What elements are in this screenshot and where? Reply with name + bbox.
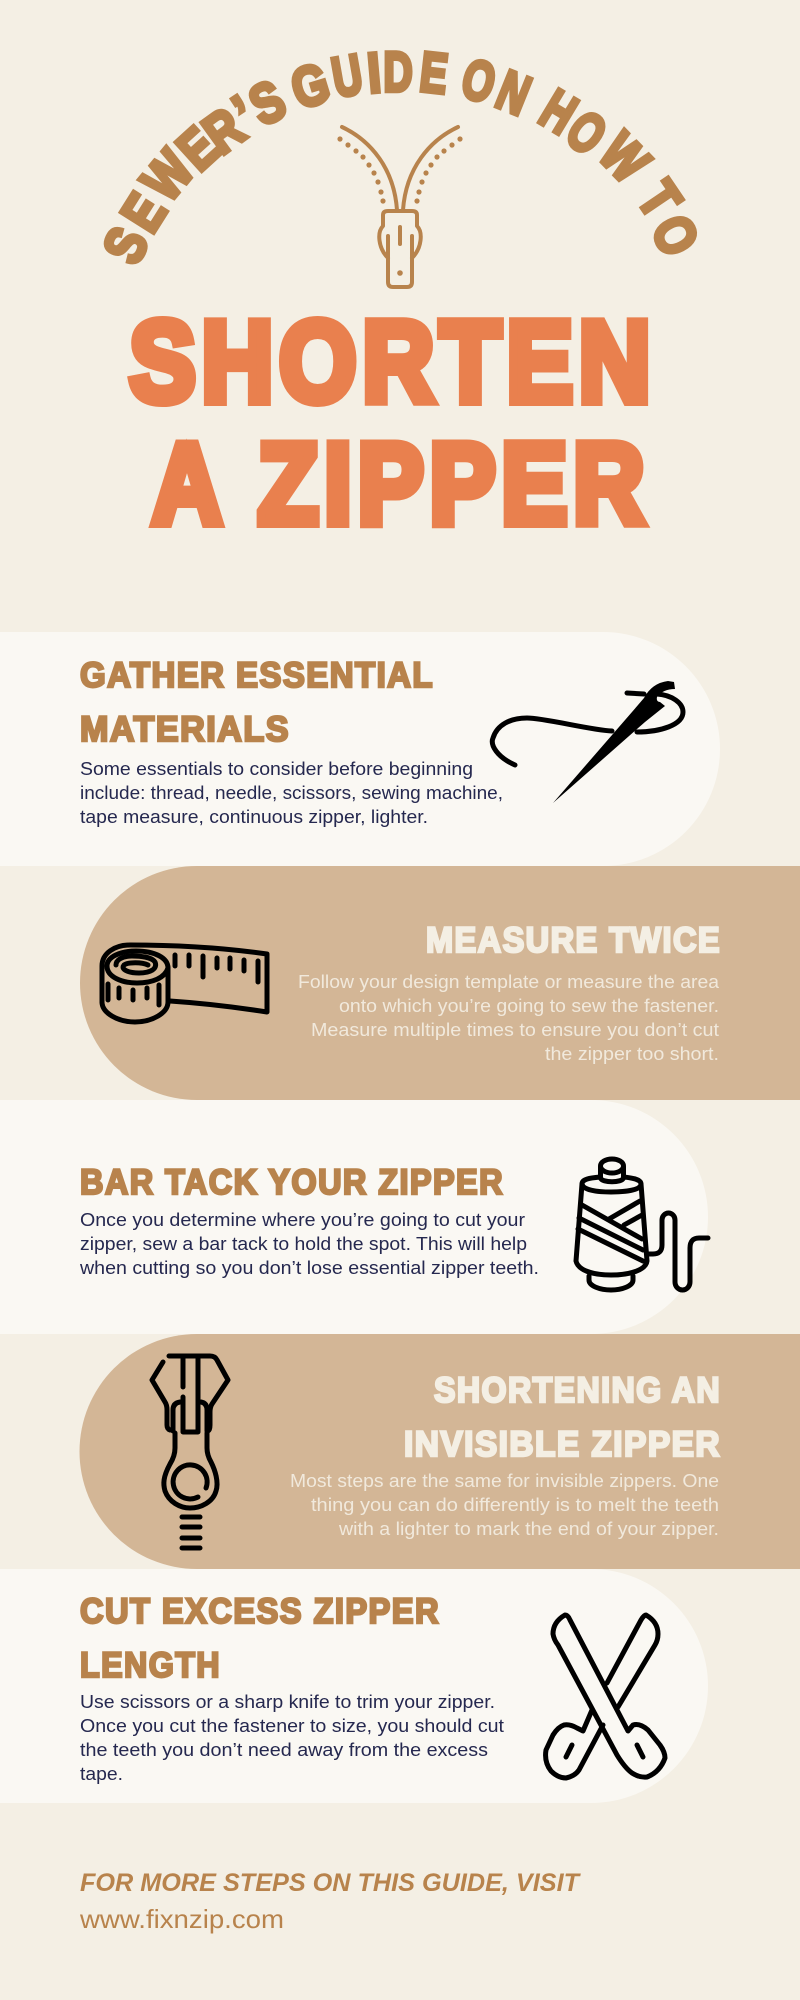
- curved heading: [91, 41, 711, 273]
- body text: [290, 1471, 719, 1539]
- heading: shortening an invisible zipper: [404, 1371, 721, 1464]
- heading: cut excess zipper length: LENGTH: [80, 1646, 221, 1685]
- heading: measure twice: MEASURE TWICE: [426, 921, 721, 960]
- heading: gather essential materials: MATERIALS: [80, 710, 290, 749]
- heading: cut excess zipper length: CUT EXCESS ZIPPER: [80, 1592, 440, 1631]
- footer call to action: FOR MORE STEPS ON THIS GUIDE, VISIT: [80, 1869, 582, 1897]
- panel: gather essential materials: [0, 632, 720, 866]
- curved heading: ’: [223, 84, 267, 143]
- heading: shortening an invisible zipper: INVISIBLE ZIPPER: [404, 1425, 721, 1464]
- body text: include: thread, needle, scissors, sewing machine,: [80, 783, 503, 803]
- curved heading: T: [626, 170, 693, 229]
- heading: shortening an invisible zipper: SHORTENING AN: [434, 1371, 721, 1410]
- main title: ZIPPER: [258, 421, 650, 548]
- icon: tape measure: [102, 945, 267, 1022]
- icon: open zipper: [337, 127, 463, 287]
- icon: scissors: [546, 1615, 665, 1778]
- curved heading: N: [488, 59, 538, 128]
- heading: gather essential materials: [80, 656, 434, 749]
- curved heading: G: [284, 51, 336, 121]
- body text: Measure multiple times to ensure you don’t cut: [311, 1020, 719, 1040]
- heading: bar tack your zipper: BAR TACK YOUR ZIPPER: [80, 1163, 504, 1202]
- heading: cut excess zipper length: [80, 1592, 440, 1685]
- panel: shortening an invisible zipper: [79, 1334, 800, 1569]
- curved heading: W: [130, 139, 206, 212]
- body text: when cutting so you don’t lose essential zipper teeth.: [79, 1258, 539, 1278]
- curved heading: E: [165, 115, 230, 182]
- curved heading: W: [587, 121, 661, 195]
- curved heading: E: [417, 41, 451, 106]
- curved heading: E: [109, 183, 178, 242]
- panel: cut excess zipper length: [0, 1569, 708, 1803]
- curved heading: I: [365, 41, 383, 104]
- body text: Some essentials to consider before beginning: [80, 759, 473, 779]
- body text: onto which you’re going to sew the fastener.: [339, 996, 719, 1016]
- body text: tape.: [80, 1764, 123, 1784]
- body text: tape measure, continuous zipper, lighter.: [80, 807, 428, 827]
- body text: [298, 972, 720, 1064]
- heading: gather essential materials: GATHER ESSENTIAL: [80, 656, 434, 695]
- body text: [80, 1692, 504, 1784]
- body text: the teeth you don’t need away from the excess: [80, 1740, 488, 1760]
- curved heading: O: [455, 48, 502, 116]
- body text: zipper, sew a bar tack to hold the spot. This will help: [80, 1234, 527, 1254]
- curved heading: S: [240, 68, 295, 137]
- footer call to action: [79, 1869, 582, 1934]
- footer call to action: www.fixnzip.com: [79, 1904, 284, 1934]
- curved heading: H: [530, 78, 587, 146]
- main title: A: [152, 421, 222, 548]
- body text: Once you cut the fastener to size, you should cut: [80, 1716, 504, 1736]
- body text: Follow your design template or measure the area: [298, 972, 720, 992]
- main title: SHORTEN: [130, 299, 656, 426]
- panel: measure twice: [80, 866, 800, 1100]
- body text: Use scissors or a sharp knife to trim your zipper.: [80, 1692, 495, 1712]
- main title: [130, 299, 656, 548]
- icon: needle and thread: [492, 681, 683, 803]
- icon: zipper pull: [152, 1356, 228, 1548]
- body text: [79, 1210, 539, 1278]
- panel: bar tack your zipper: [0, 1100, 708, 1334]
- curved heading: O: [639, 205, 711, 265]
- body text: [80, 759, 503, 827]
- body text: Most steps are the same for invisible zippers. One: [290, 1471, 719, 1491]
- curved heading: S: [91, 218, 161, 273]
- curved heading: U: [328, 44, 367, 110]
- icon: thread spool: [576, 1159, 708, 1290]
- body text: with a lighter to mark the end of your zipper.: [338, 1519, 719, 1539]
- curved heading: D: [383, 42, 413, 104]
- curved heading: O: [555, 99, 617, 167]
- body text: Once you determine where you’re going to cut your: [80, 1210, 525, 1230]
- body text: thing you can do differently is to melt the teeth: [311, 1495, 719, 1515]
- curved heading: R: [192, 96, 255, 166]
- body text: the zipper too short.: [545, 1044, 719, 1064]
